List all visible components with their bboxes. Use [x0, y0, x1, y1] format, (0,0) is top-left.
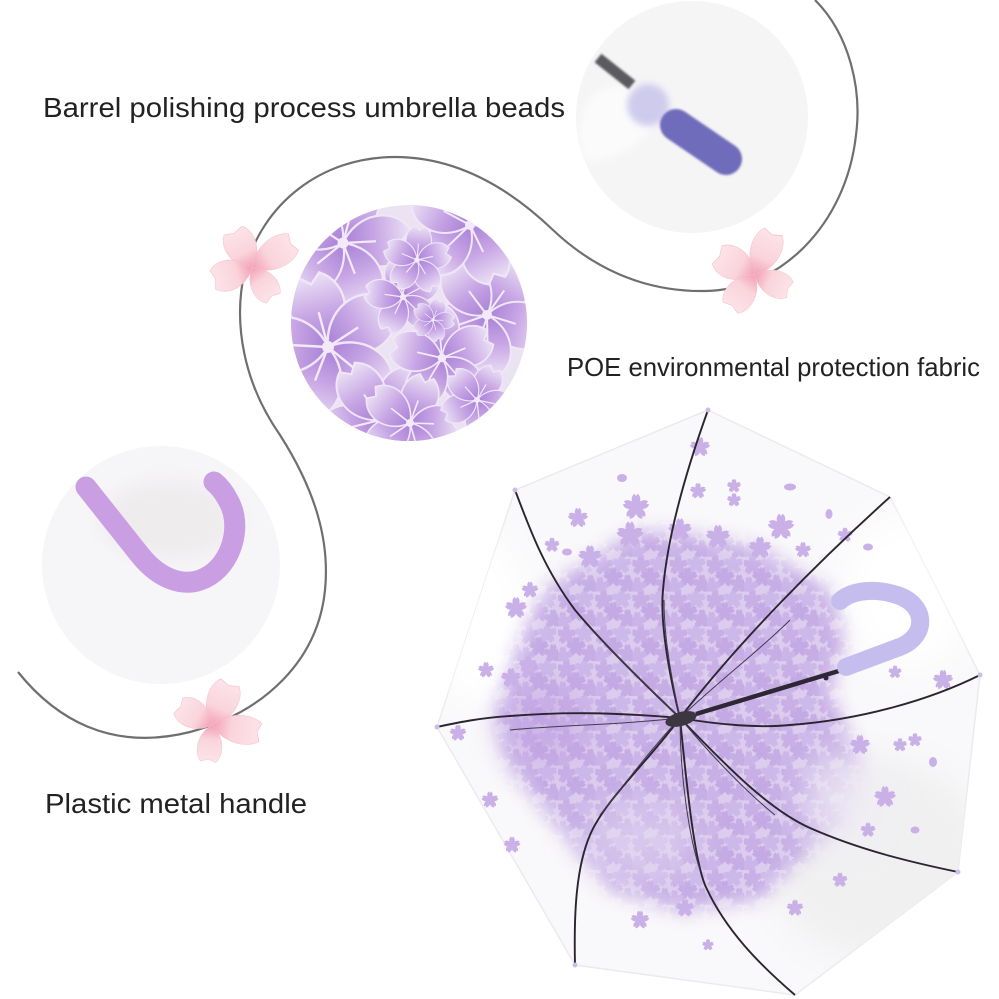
icon: sakura right: [709, 226, 795, 317]
heading: handle: Plastic metal handle: [45, 788, 307, 819]
photo: fabric swatch: [291, 205, 527, 441]
scattered flowers: [449, 437, 954, 951]
canopy: [437, 410, 980, 995]
photo: umbrella bead: [576, 1, 808, 233]
handle: [840, 591, 920, 667]
photo: handle: [42, 446, 280, 684]
icon: sakura left: [208, 223, 302, 306]
icon: sakura bottom: [171, 676, 263, 763]
umbrella: [430, 408, 990, 995]
rim tips: [434, 408, 982, 968]
ribs: [437, 410, 980, 995]
shaft: [696, 670, 842, 714]
stretchers: [510, 600, 790, 870]
connecting curve: [18, 0, 857, 738]
flower cluster: [483, 520, 869, 922]
heading: fabric: POE environmental protection fabric: [567, 352, 980, 382]
heading: barrel polishing: Barrel polishing process umbrella beads: [43, 92, 565, 123]
